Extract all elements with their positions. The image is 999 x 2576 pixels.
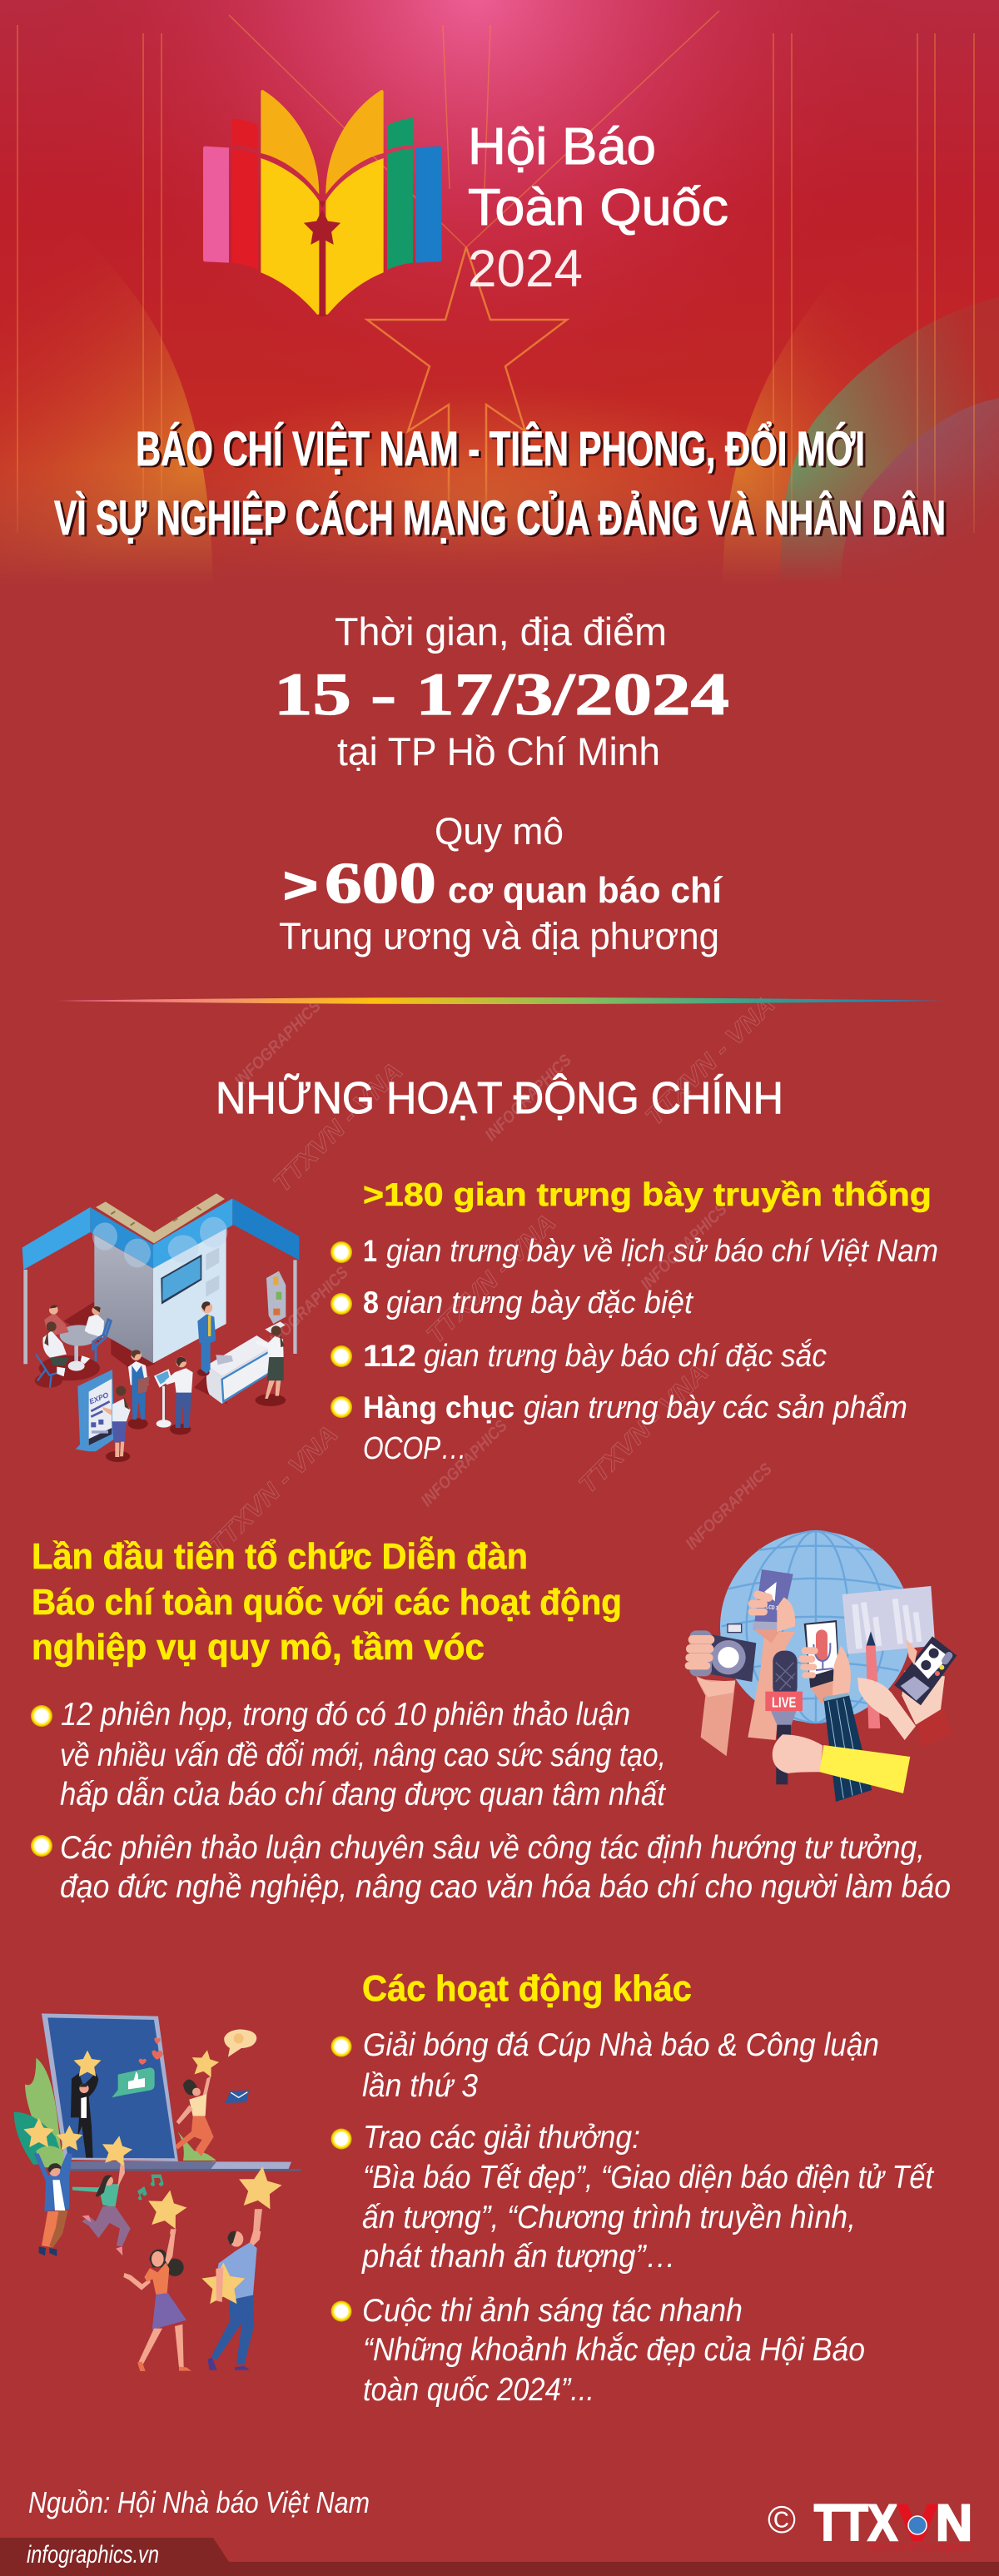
bullet: awards [331,2120,935,2275]
bullet 3: 112 [363,1339,416,1373]
phone hand: LCD 120 [766,1604,783,1612]
thumbs-up chat bubble [112,2067,155,2097]
forum heading: Lần đầu tiên tổ chức Diễn đàn [32,1535,528,1577]
header background with arcs and star [0,0,999,633]
list: forum activities [31,1697,951,1905]
hearts [139,2037,163,2065]
figure: man with tablet [154,1357,193,1428]
scale: cơ quan báo chí [448,870,723,911]
camera hand [685,1624,756,1756]
speech bubble [224,2029,256,2057]
bullet: sessions: hấp dẫn của báo chí đang được quan tâm nhất [60,1777,667,1813]
main title [54,422,946,545]
figure: woman with folder [128,1350,150,1420]
scale: > [283,858,318,913]
logo wordmark: Hội Báo [468,118,656,176]
time and place: 15 - 17/3/2024 [274,661,729,728]
raised arms [170,2209,262,2234]
woman in orange top and purple skirt [123,2233,191,2371]
logo: book icon [203,90,442,316]
illustration: exhibition booth [22,1193,299,1462]
scale: 600 [325,852,436,916]
watermarks: INFOGRAPHICS [482,1051,575,1145]
music notes [137,2175,164,2200]
forum heading [32,1535,622,1668]
watermarks: INFOGRAPHICS [638,1200,731,1294]
scale: Quy mô [435,810,564,853]
watermarks: TTXVN - VNA [268,1057,408,1197]
watermarks [203,991,780,1560]
TTXVN logo: V [897,2494,937,2551]
pinstriped sleeve [823,1693,872,1802]
chart sheet [842,1586,935,1654]
list: exhibition stands [331,1177,938,1466]
man in blue shirt with star [201,2231,261,2370]
list: exhibition stands: >180 gian trưng bày truyền thống [363,1177,932,1213]
forum heading: nghiệp vụ quy mô, tầm vóc [32,1627,485,1668]
rainbow divider [56,997,944,1004]
bullet: sessions [31,1697,667,1813]
bullet: sessions: về nhiều vấn đề đổi mới, nâng cao sức sáng tạo, [60,1738,666,1773]
list: other activities: Các hoạt động khác [362,1968,692,2009]
watermarks: INFOGRAPHICS [418,1416,511,1510]
bullet: football: lần thứ 3 [362,2068,478,2104]
digital kiosk [76,1370,114,1451]
digital kiosk: EXPO [88,1390,110,1405]
time and place: tại TP Hồ Chí Minh [337,729,660,773]
bullet: awards: ấn tượng”, “Chương trình truyền hình, [362,2200,856,2235]
watermarks: TTXVN - VNA [421,1209,561,1349]
illustration: globe with reporters' hands [685,1531,957,1802]
live microphone: LIVE [772,1694,796,1711]
source: Nguồn: Hội Nhà báo Việt Nam [28,2485,370,2519]
bullet 4 [331,1390,907,1466]
scale [279,810,723,957]
figure: woman at counter [256,1325,285,1399]
woman in green top [72,2162,131,2255]
time and place: Thời gian, địa điểm [335,609,667,654]
logo wordmark [468,118,728,298]
TTXVN logo [768,2494,972,2553]
bullet 3: gian trưng bày báo chí đặc sắc [424,1338,827,1374]
TTXVN logo: TTX [814,2494,897,2551]
scale: Trung ương và địa phương [279,915,719,957]
woman in cream top [176,2076,214,2156]
bullet: in-depth sessions [31,1830,951,1905]
bullet: awards: Trao các giải thưởng: [363,2120,640,2156]
TTXVN logo: N [936,2494,972,2551]
figure: man in blue suit [197,1301,216,1374]
bullet: awards: phát thanh ấn tượng”… [361,2239,676,2275]
man with raised star, blue jacket [34,2154,72,2256]
bullet 1: 1 [363,1234,377,1268]
bullet 4: Hàng chục [363,1390,514,1425]
bullet: awards: “Bìa báo Tết đẹp”, “Giao diện báo điện tử Tết [363,2160,935,2196]
watermarks: INFOGRAPHICS [683,1460,776,1554]
envelope [226,2091,249,2103]
bullet: in-depth sessions: Các phiên thảo luận chuyên sâu về công tác định hướng tư tưởng, [60,1830,925,1866]
fist with yellow sleeve [773,1734,910,1793]
round table group [36,1305,111,1388]
illustration: laptop with people and stars [14,2013,301,2371]
TTXVN logo: © [768,2498,796,2541]
man on screen in black suit [71,2073,98,2158]
phone hand [748,1569,795,1740]
bullet 4: gian trưng bày các sản phẩm [524,1390,907,1425]
footer band [0,2538,999,2576]
live microphone [765,1651,803,1784]
TTXVN logo: Vietnam News Agency [869,2541,972,2553]
bullet 1: gian trưng bày về lịch sử báo chí Việt Nam [386,1234,938,1269]
bullet 2: 8 [363,1286,379,1320]
pencil [866,1631,880,1728]
bullet: football [331,2027,879,2104]
footer band: infographics.vn [27,2541,159,2569]
logo wordmark: Toàn Quốc [468,179,728,236]
section heading: NHỮNG HOẠT ĐỘNG CHÍNH [216,1073,783,1123]
bullet: sessions: 12 phiên họp, trong đó có 10 phiên thảo luận [61,1697,630,1733]
smartphone with microphone icon [798,1620,851,1704]
recorder hand [857,1636,957,1748]
bullet: photo contest [331,2293,865,2408]
bullet 2: gian trưng bày đặc biệt [386,1286,693,1320]
bullet 4: OCOP… [363,1431,467,1466]
watermarks: INFOGRAPHICS [259,1263,352,1357]
stars [23,2047,284,2230]
logo wordmark: 2024 [468,240,583,298]
list: other activities [331,1968,935,2408]
watermarks: TTXVN - VNA [203,1420,343,1560]
figure: woman at kiosk [102,1386,131,1457]
bullet: photo contest: toàn quốc 2024”... [363,2372,594,2408]
watermarks: TTXVN - VNA [640,991,780,1131]
watermarks: INFOGRAPHICS [231,997,325,1091]
bullet: photo contest: Cuộc thi ảnh sáng tác nhanh [362,2293,743,2329]
bullet: photo contest: “Những khoảnh khắc đẹp của Hội Báo [363,2332,865,2368]
forum heading: Báo chí toàn quốc với các hoạt động [32,1582,622,1623]
time and place [274,609,729,773]
bullet: football: Giải bóng đá Cúp Nhà báo & Công luận [363,2027,879,2063]
watermarks: TTXVN - VNA [574,1359,713,1499]
